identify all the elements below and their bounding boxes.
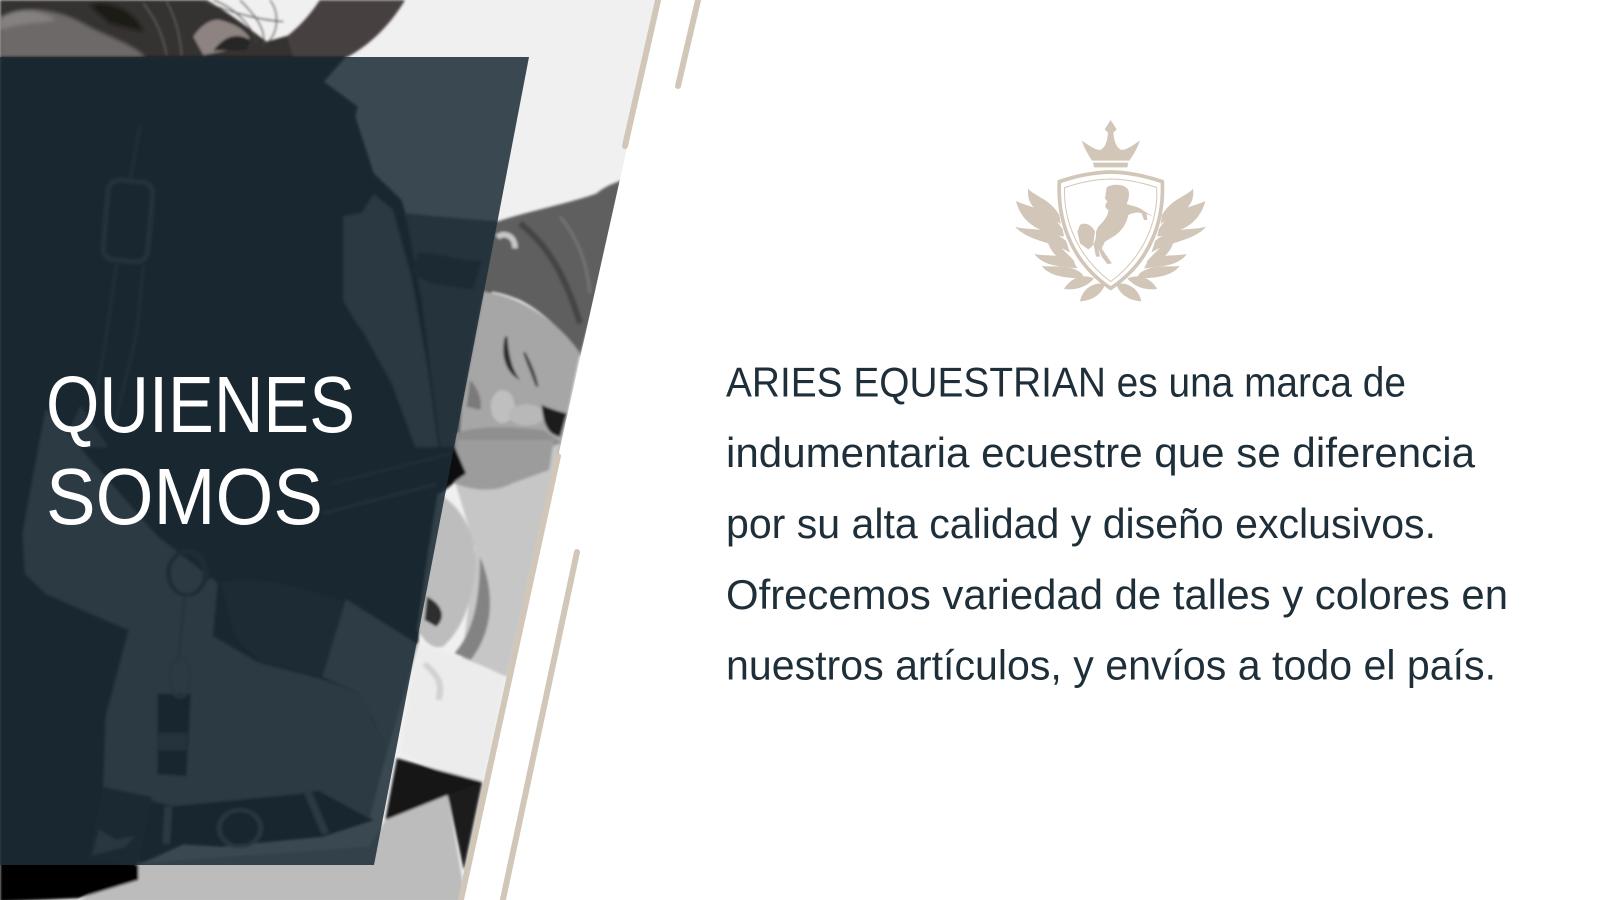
buckle and halter strap bbox=[102, 178, 154, 264]
panel: translucent dark title block bbox=[0, 57, 529, 865]
accent stripe: lower right bbox=[502, 552, 577, 900]
muzzle, shirt, white sleeve, pants bbox=[0, 440, 561, 900]
icon: right wing bbox=[1116, 188, 1206, 301]
text block: brand description: por su alta calidad y diseño exclusivos. bbox=[726, 500, 1436, 547]
accent stripe: upper left bbox=[625, 0, 659, 146]
horse head top and ear bbox=[0, 0, 405, 58]
title bbox=[46, 360, 355, 541]
text block: brand description: indumentaria ecuestre que se diferencia bbox=[726, 429, 1476, 476]
icon: left wing bbox=[1015, 188, 1105, 301]
woman torso and arm under panel bbox=[22, 410, 418, 866]
woman hair and face bbox=[454, 179, 620, 453]
text block: brand description: nuestros artículos, y envíos a todo el país. bbox=[726, 642, 1496, 688]
text block: brand description: Ofrecemos variedad de talles y colores en bbox=[726, 571, 1508, 618]
photo: woman with horse bbox=[0, 0, 680, 900]
icon: crown bbox=[1082, 120, 1140, 167]
title: QUIENES bbox=[46, 360, 355, 449]
text block: brand description bbox=[726, 358, 1508, 688]
horse body, dark head under panel bbox=[0, 57, 503, 452]
accent stripe: upper right bbox=[678, 0, 699, 86]
horse jaw, dark base under the lower panel bbox=[0, 447, 466, 865]
icon: crest logo with crown, shield, rearing horse and wings bbox=[1015, 120, 1206, 301]
text block: brand description: ARIES EQUESTRIAN es una marca de bbox=[726, 358, 1406, 406]
icon: shield bbox=[1059, 172, 1162, 288]
title: SOMOS bbox=[46, 452, 323, 541]
accent stripe: lower left bbox=[460, 456, 558, 900]
icon: rearing horse bbox=[1077, 185, 1153, 264]
